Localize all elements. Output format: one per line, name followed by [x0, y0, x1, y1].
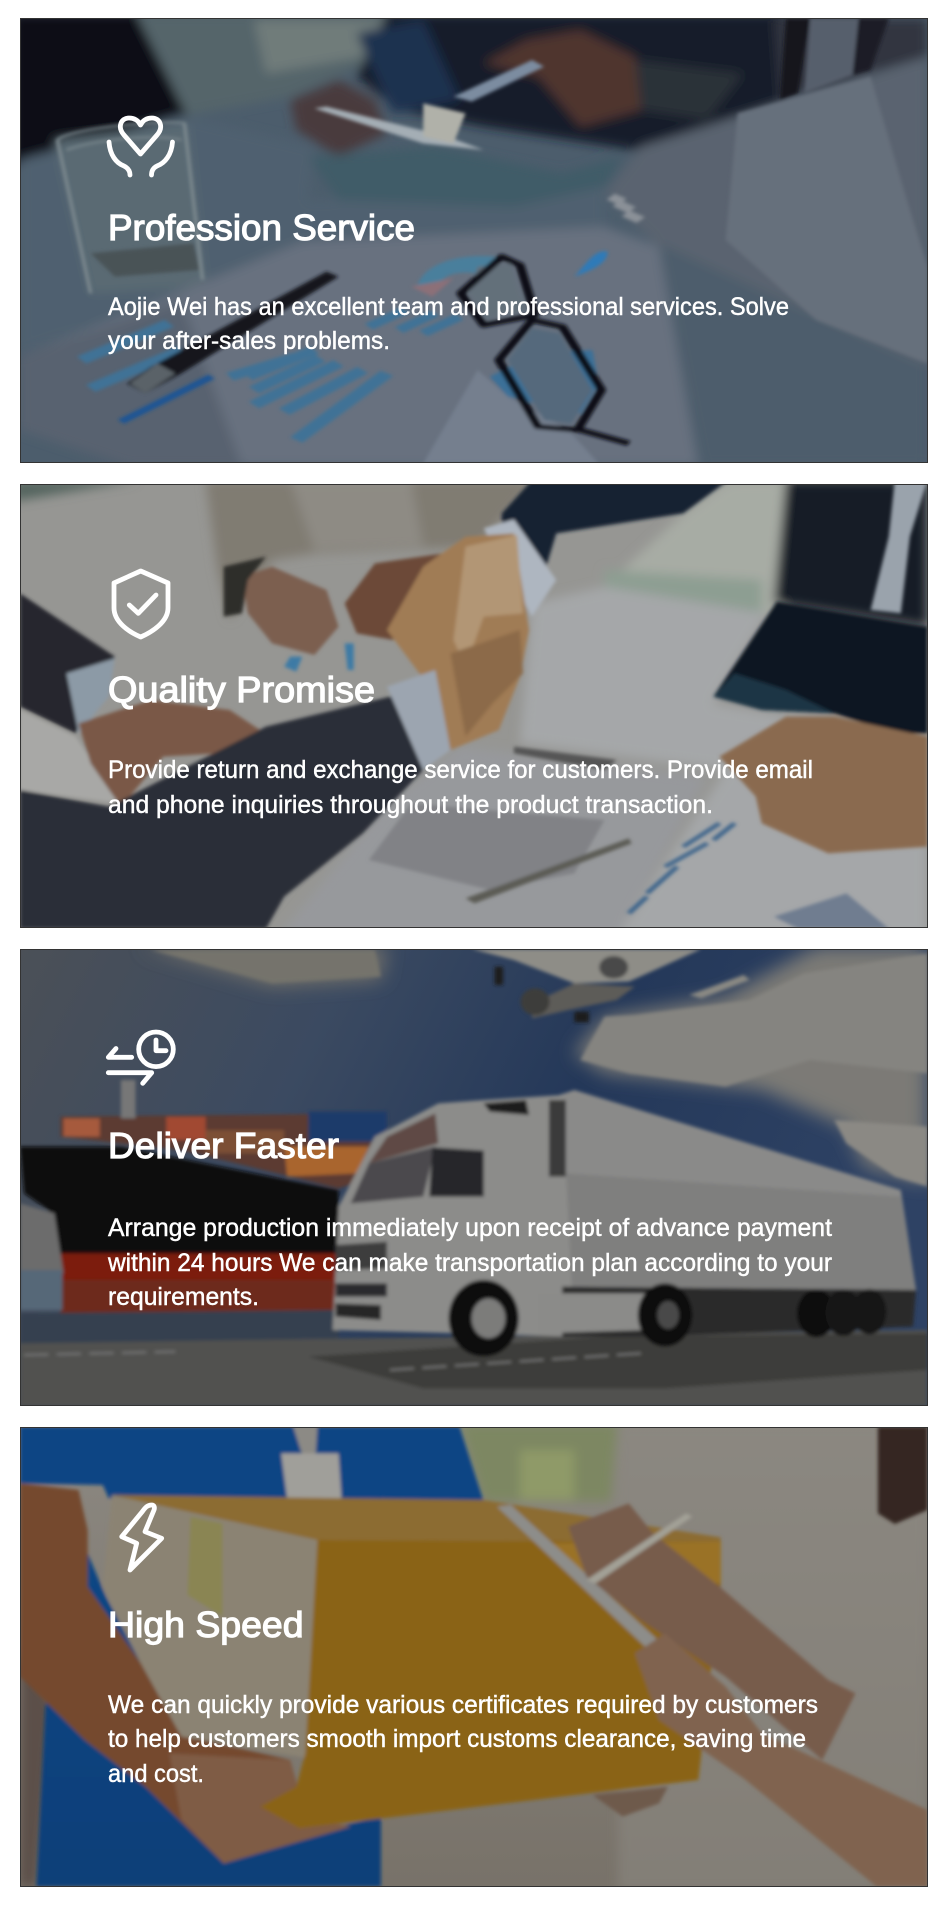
text block: quality promise description: Provide return and exchange service for customers. Provide email: [108, 756, 813, 784]
heading: deliver faster: Deliver Faster: [108, 1125, 339, 1166]
text block: deliver faster description: requirements.: [108, 1283, 259, 1311]
text block: quality promise description: [108, 756, 813, 819]
photo: business handshake over contract: [12, 480, 927, 937]
text block: profession service description: [108, 293, 789, 355]
panel: profession service: [12, 13, 927, 467]
text block: high speed description: and cost.: [108, 1760, 204, 1788]
photo: business meeting with charts and glasses: [12, 13, 927, 467]
heading: high speed: High Speed: [108, 1604, 304, 1645]
text block: quality promise description: and phone inquiries throughout the product transaction.: [108, 791, 713, 819]
icon: shield with check mark: [114, 571, 168, 637]
text block: high speed description: We can quickly provide various certificates required by customers: [108, 1691, 818, 1719]
photo: truck, cargo ship and plane: [20, 947, 927, 1406]
text block: deliver faster description: Arrange production immediately upon receipt of advance payment: [108, 1214, 832, 1242]
icon: lightning bolt: [122, 1505, 162, 1570]
photo: courier handing over cardboard box: [20, 1423, 927, 1890]
text block: profession service description: your after-sales problems.: [108, 327, 390, 355]
panel: high speed: [20, 1423, 927, 1890]
text block: deliver faster description: within 24 hours We can make transportation plan according to your: [107, 1249, 832, 1277]
panel: quality promise: [12, 480, 927, 937]
text block: high speed description: to help customers smooth import customs clearance, saving time: [108, 1725, 806, 1753]
text block: profession service description: Aojie Wei has an excellent team and professional services. Solve: [108, 293, 789, 321]
heading: quality promise: Quality Promise: [108, 669, 375, 710]
text block: deliver faster description: [107, 1214, 832, 1311]
panel: deliver faster: [20, 947, 927, 1406]
icon: heart held in hands: [109, 118, 172, 175]
icon: arrows and clock: [108, 1032, 173, 1083]
text block: high speed description: [108, 1691, 818, 1788]
heading: profession service: Profession Service: [108, 207, 415, 248]
